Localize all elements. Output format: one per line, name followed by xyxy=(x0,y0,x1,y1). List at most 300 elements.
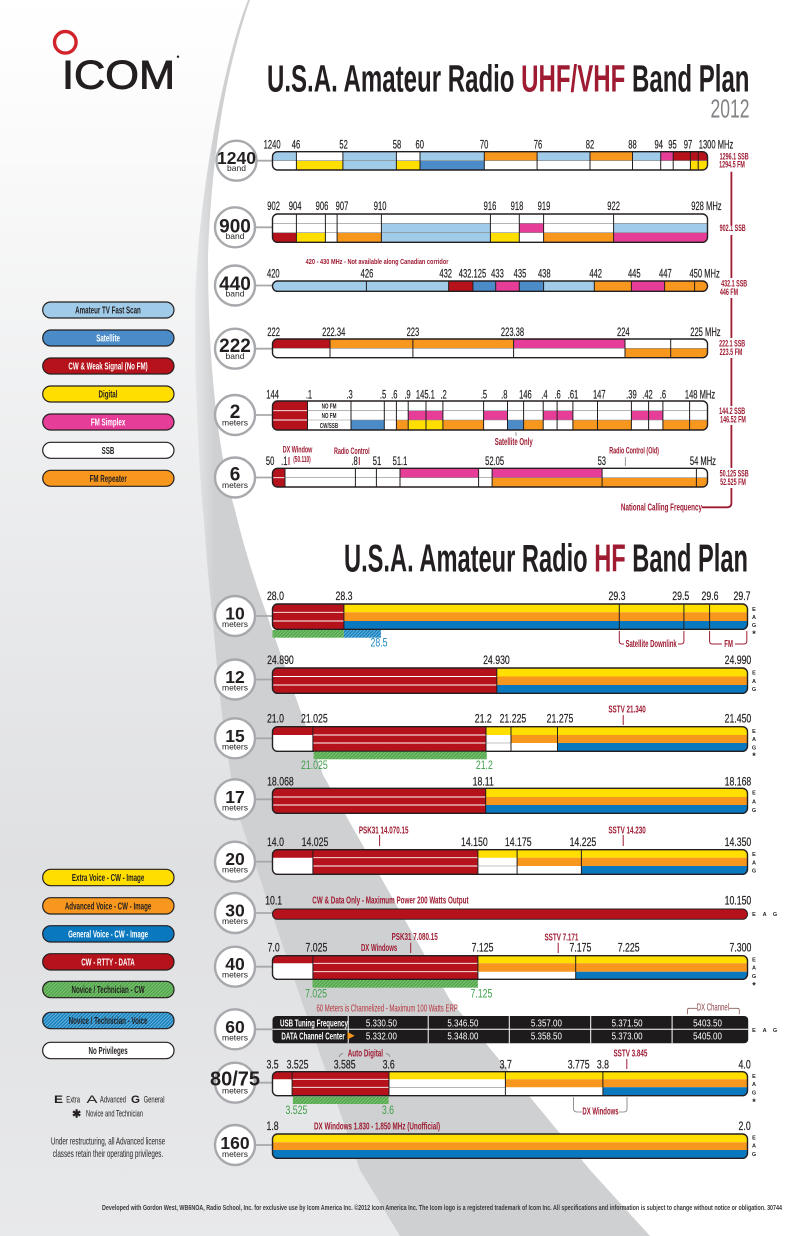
frequency labels: 440: 450 MHz xyxy=(689,268,720,281)
frequency labels: 12 meters: 24.890 xyxy=(267,655,294,667)
band: 440 xyxy=(215,258,720,306)
frequency labels: 80/75 meters: 3.585 xyxy=(334,1059,356,1072)
class letters: 10 meters: * xyxy=(752,629,756,639)
class letters: 17 meters xyxy=(752,791,756,814)
band: 2 meters xyxy=(215,389,715,447)
note: restructuring xyxy=(51,1135,165,1159)
badge: 10 meters: meters xyxy=(222,619,248,629)
key: license letters xyxy=(54,1094,165,1120)
frequency labels: 440: 432.125 xyxy=(459,268,486,281)
frequency labels: 10 meters: 29.3 xyxy=(609,591,626,603)
logo: Icom: ICOM xyxy=(62,53,175,97)
frequency labels: 900: 922 xyxy=(607,201,620,214)
frequency labels: 900: 904 xyxy=(289,201,302,214)
badge: 10 meters xyxy=(215,596,272,636)
frequency labels: 1240: 1300 MHz xyxy=(699,139,733,152)
note: Canadian corridor: 420 - 430 MHz - Not available along Canadian corridor xyxy=(306,258,449,266)
calling frequency values: 432.1 SSB xyxy=(721,278,748,289)
bar: 30 meters xyxy=(272,909,748,919)
class letters: 40 meters: * xyxy=(752,980,756,990)
badge: 6 meters: meters xyxy=(222,480,248,490)
frequency labels: 900: 906 xyxy=(316,201,328,214)
note: 30 meters power: CW & Data Only - Maximum Power 200 Watts Output xyxy=(312,894,469,906)
novice segment: 15 meters xyxy=(301,752,493,772)
badge: 440 band: 440 xyxy=(219,274,251,295)
frequency labels: 440: 432 xyxy=(439,268,452,281)
class letters: 10 meters: G xyxy=(752,623,756,629)
legend: UHF/VHF modes: Amateur TV Fast Scan xyxy=(75,304,141,316)
frequency labels: 80/75 meters: 3.525 xyxy=(287,1059,309,1072)
note: 60 meters channelized: 60 Meters is Channelized - Maximum 100 Watts ERP xyxy=(316,1003,458,1014)
legend: HF license classes: No Privileges xyxy=(88,1044,128,1056)
frequency labels: 40 meters: 7.0 xyxy=(268,943,280,955)
frequency labels: 15 meters: 21.0 xyxy=(267,714,284,726)
key: license letters: Advanced xyxy=(100,1094,126,1105)
novice segment: 40 meters xyxy=(305,980,493,1001)
frequency labels: 1240: 46 xyxy=(292,139,300,152)
note: restructuring: Under restructuring, all Advanced license xyxy=(51,1135,165,1147)
class letters: 15 meters: * xyxy=(752,751,756,761)
class letters: 12 meters xyxy=(752,670,756,693)
frequency labels: 80/75 meters: 3.8 xyxy=(597,1059,609,1072)
legend: UHF/VHF modes: SSB xyxy=(102,444,114,456)
table: 60 meters channels: 5405.00 xyxy=(693,1030,722,1042)
novice segment: 40 meters: 7.025 xyxy=(305,989,327,1001)
key: license letters: General xyxy=(144,1094,165,1105)
frequency labels: 900 xyxy=(267,201,722,214)
bar: 1240 segments xyxy=(272,152,708,170)
frequency labels: 2 meters: .5 xyxy=(380,389,386,402)
callouts: 6 meters windows: DX Window xyxy=(283,444,313,455)
table: 60 meters channels: 5.357.00 xyxy=(531,1018,562,1029)
frequency labels: 900: 910 xyxy=(374,201,387,214)
frequency labels: 1240: 95 xyxy=(668,139,677,152)
badge: 900 band: band xyxy=(226,231,245,241)
frequency labels: 6 meters: .1 xyxy=(281,456,287,469)
class letters: 30 meters xyxy=(752,912,777,918)
class letters: 10 meters xyxy=(752,607,756,639)
callout: DX channel: DX Channel xyxy=(697,1002,729,1013)
frequency labels: 222: 223.38 xyxy=(501,327,524,340)
band: 20 meters xyxy=(215,824,756,882)
table: 60 meters channels: 5.358.50 xyxy=(531,1030,562,1042)
class letters: 60 meters: A xyxy=(763,1028,767,1034)
badge: 17 meters xyxy=(215,779,272,819)
frequency labels: 1240: 58 xyxy=(393,139,401,152)
frequency labels: 900: 916 xyxy=(484,201,496,214)
table: 60 meters channels: 5.373.00 xyxy=(612,1030,643,1042)
bar: 160 meters segments xyxy=(272,1134,748,1158)
badge: 20 meters xyxy=(215,842,272,882)
legend: UHF/VHF modes: FM Repeater xyxy=(90,472,127,484)
badge: 80/75 meters xyxy=(210,1063,272,1103)
novice segment: 80/75 meters: 3.525 xyxy=(286,1105,308,1117)
frequency labels: 1240 xyxy=(264,139,733,152)
callouts: PSK31 and SSTV 20 meters: SSTV 14.230 xyxy=(608,824,646,836)
national calling frequency column xyxy=(621,151,749,513)
frequency labels: 2 meters: 145.1 xyxy=(416,389,435,402)
frequency labels: 222: 225 MHz xyxy=(690,327,721,340)
table: 60 meters channels xyxy=(272,1016,748,1043)
callouts: 6 meters windows xyxy=(283,444,659,466)
class letters: 160 meters: A xyxy=(752,1144,756,1150)
badge: 40 meters: 40 xyxy=(225,954,245,974)
frequency labels: 440: 435 xyxy=(514,268,526,281)
frequency labels: 900: 919 xyxy=(538,201,550,214)
legend: HF license classes: General Voice - CW - Image xyxy=(68,928,148,940)
note: 160 meters DX windows: DX Windows 1.830 - 1.850 MHz (Unofficial) xyxy=(314,1120,440,1132)
class letters: 40 meters: G xyxy=(752,974,756,980)
badge: 222 band: band xyxy=(226,351,245,361)
badge: 40 meters: meters xyxy=(222,970,248,980)
frequency labels: 80/75 meters: 3.5 xyxy=(266,1059,279,1072)
frequency labels: 900: 918 xyxy=(511,201,523,214)
class letters: 160 meters: E xyxy=(752,1136,756,1142)
calling frequency values: 144.2 SSB xyxy=(719,406,746,416)
band: 15 meters xyxy=(215,703,756,772)
calling frequency line xyxy=(702,172,731,507)
badge: 60 meters: 60 xyxy=(225,1017,245,1037)
legend: UHF/VHF modes: Digital xyxy=(99,388,117,400)
frequency labels: 17 meters xyxy=(267,777,752,789)
class letters: 10 meters: E xyxy=(752,607,756,613)
frequency labels: 30 meters: 10.1 xyxy=(265,895,282,908)
badge: 6 meters xyxy=(215,458,272,498)
badge: 30 meters: 30 xyxy=(225,900,245,920)
frequency labels: 40 meters: 7.225 xyxy=(618,943,640,955)
badge: 160 meters xyxy=(215,1125,272,1165)
frequency labels: 10 meters xyxy=(267,591,751,603)
legend: HF license classes: Novice / Technician - CW xyxy=(72,983,145,995)
class letters: 20 meters xyxy=(752,852,756,875)
callouts: auto digital and SSTV xyxy=(339,1047,648,1069)
frequency labels: 80/75 meters: 3.6 xyxy=(383,1059,395,1072)
frequency labels: 2 meters: 148 MHz xyxy=(685,389,715,402)
frequency labels: 12 meters: 24.990 xyxy=(725,655,752,667)
key: license letters: G xyxy=(131,1094,140,1106)
callouts: PSK31 and SSTV 20 meters xyxy=(359,824,646,846)
table: 60 meters channels: DATA Channel Center xyxy=(281,1030,345,1042)
frequency labels: 6 meters: 51 xyxy=(373,456,381,469)
frequency labels: 17 meters: 18.11 xyxy=(473,777,494,789)
badge: 1240 band: 1240 xyxy=(217,148,256,168)
callouts: 40 meters windows: PSK31 7.080.15 xyxy=(392,930,438,942)
frequency labels: 6 meters: 51.1 xyxy=(393,456,407,469)
note: restructuring: classes retain their operating privileges. xyxy=(53,1147,163,1159)
callout: DX channel xyxy=(688,1002,739,1014)
class letters: 15 meters xyxy=(752,729,756,761)
class letters: 160 meters xyxy=(752,1136,756,1158)
legend: HF license classes: Extra Voice - CW - Image xyxy=(72,871,145,883)
frequency labels: 2 meters: .5 xyxy=(481,389,487,402)
callout: national calling frequency: National Calling Frequency xyxy=(621,501,702,513)
callouts: 6 meters windows: (50.110) xyxy=(293,456,311,464)
band: 30 meters xyxy=(215,893,777,933)
badge: 440 band: band xyxy=(226,288,245,298)
brackets: satellite downlink and FM: FM xyxy=(724,639,733,649)
frequency labels: 1240: 60 xyxy=(415,139,424,152)
badge: 160 meters: 160 xyxy=(220,1133,250,1153)
calling frequency values: 222.1 SSB xyxy=(719,338,746,349)
frequency labels: 20 meters: 14.150 xyxy=(461,837,488,849)
frequency labels: 222 xyxy=(267,327,721,340)
calling frequency values: 1294.5 FM xyxy=(719,159,745,170)
badge: 15 meters: meters xyxy=(222,741,248,751)
bar: 222 segments xyxy=(272,339,708,358)
frequency labels: 80/75 meters: 3.7 xyxy=(500,1059,512,1072)
frequency labels: 160 meters: 2.0 xyxy=(739,1121,751,1133)
class letters: 10 meters: A xyxy=(752,615,756,621)
table: 60 meters channels: USB Tuning Frequency xyxy=(280,1017,348,1029)
class letters: 80/75 meters xyxy=(752,1074,756,1107)
calling frequency values: 52.525 FM xyxy=(720,477,746,487)
novice segment: 80/75 meters xyxy=(286,1097,394,1117)
key: license letters: E xyxy=(54,1094,63,1106)
bar: 440 segments xyxy=(272,281,708,291)
frequency labels: 40 meters: 7.175 xyxy=(570,943,592,955)
calling frequency values xyxy=(719,151,749,487)
frequency labels: 2 meters xyxy=(266,389,715,402)
frequency labels: 30 meters xyxy=(265,895,752,908)
key: license letters: Novice and Technician xyxy=(86,1108,143,1119)
frequency labels: 10 meters: 29.5 xyxy=(672,591,690,603)
bar: 2 meters segments: NO FM xyxy=(322,413,336,420)
frequency labels: 10 meters: 28.0 xyxy=(267,591,284,603)
key: license letters: Extra xyxy=(66,1094,80,1105)
class letters: 30 meters: G xyxy=(773,912,777,918)
class letters: 160 meters: G xyxy=(752,1152,756,1158)
frequency labels: 2 meters: 144 xyxy=(266,389,279,402)
frequency labels: 2 meters: .4 xyxy=(541,389,548,402)
band: 60 meters xyxy=(215,1002,777,1049)
frequency labels: 15 meters: 21.450 xyxy=(725,714,752,726)
callout: SSTV 21.340: SSTV 21.340 xyxy=(608,703,646,715)
frequency labels: 440: 426 xyxy=(361,268,373,281)
legend: UHF/VHF modes: FM Simplex xyxy=(91,416,126,428)
frequency labels: 2 meters: .8 xyxy=(501,389,507,402)
class letters: 12 meters: A xyxy=(752,679,756,685)
frequency labels: 15 meters xyxy=(267,714,752,726)
bracket: DX windows xyxy=(574,1097,627,1117)
class letters: 60 meters xyxy=(752,1028,777,1034)
badge: 222 band: 222 xyxy=(219,336,251,357)
badge: 1240 band: band xyxy=(227,163,246,173)
frequency labels: 6 meters: .8 xyxy=(351,456,358,469)
bar: 15 meters segments xyxy=(272,727,748,751)
band: 17 meters xyxy=(215,777,756,819)
frequency labels: 1240: 97 xyxy=(684,139,692,152)
band: 6 meters xyxy=(215,444,716,498)
frequency labels: 12 meters xyxy=(267,655,752,667)
frequency labels: 20 meters: 14.025 xyxy=(302,837,329,849)
band: 1240 xyxy=(216,139,733,181)
frequency labels: 2 meters: .6 xyxy=(660,389,666,402)
calling frequency values: 146.52 FM xyxy=(720,414,746,425)
frequency labels: 15 meters: 21.025 xyxy=(301,714,328,726)
frequency labels: 40 meters: 7.125 xyxy=(472,943,494,955)
frequency labels: 1240: 1240 xyxy=(264,139,281,152)
logo: Icom xyxy=(55,32,179,97)
frequency labels: 6 meters: 53 xyxy=(598,456,606,469)
class letters: 12 meters: E xyxy=(752,670,756,676)
bar: 2 meters segments: NO FM xyxy=(322,404,336,411)
frequency labels: 222: 224 xyxy=(617,327,630,340)
legend: HF license classes xyxy=(43,869,174,1059)
callouts: auto digital and SSTV: Auto Digital xyxy=(348,1047,383,1059)
bar: 20 meters segments xyxy=(272,850,748,874)
frequency labels: 20 meters: 14.350 xyxy=(725,837,752,849)
badge: 20 meters: 20 xyxy=(225,849,245,869)
badge: 2 meters: meters xyxy=(222,418,248,428)
class letters: 15 meters: E xyxy=(752,729,756,735)
frequency labels: 222: 223 xyxy=(407,327,419,340)
band: 160 meters xyxy=(215,1120,756,1165)
frequency labels: 15 meters: 21.275 xyxy=(547,714,574,726)
badge: 12 meters xyxy=(215,660,272,700)
legend: HF license classes: CW - RTTY - DATA xyxy=(81,956,135,968)
frequency labels: 40 meters xyxy=(268,943,752,955)
calling frequency values: 1296.1 SSB xyxy=(720,151,749,162)
callouts: 40 meters windows xyxy=(361,930,579,953)
badge: 15 meters xyxy=(215,718,272,758)
frequency labels: 20 meters: 14.175 xyxy=(505,837,532,849)
calling frequency values: 902.1 SSB xyxy=(720,223,746,233)
callout: satellite only: Satellite Only xyxy=(495,437,533,447)
badge: 80/75 meters: 80/75 xyxy=(210,1068,260,1090)
class letters: 17 meters: E xyxy=(752,791,756,797)
frequency labels: 10 meters: 28.3 xyxy=(336,591,353,603)
bar: 2 meters segments xyxy=(272,401,708,430)
table: 60 meters channels: 5.348.00 xyxy=(447,1030,478,1042)
badge: 440 band xyxy=(215,266,272,306)
callouts: 6 meters windows: Radio Control xyxy=(334,446,370,456)
callout: SSTV 21.340 xyxy=(608,703,646,725)
frequency labels: 40 meters: 7.300 xyxy=(730,943,752,955)
badge: 17 meters: 17 xyxy=(225,787,245,807)
frequency labels: 1240: 76 xyxy=(534,139,542,152)
class letters: 20 meters: A xyxy=(752,860,756,866)
band: 10 meters xyxy=(215,591,756,650)
class letters: 17 meters: A xyxy=(752,800,756,806)
badge: 1240 band xyxy=(216,141,272,181)
bar: 2 meters segments: CW/SSB xyxy=(320,423,338,430)
frequency labels: 1240: 70 xyxy=(480,139,489,152)
frequency labels: 40 meters: 7.025 xyxy=(306,943,328,955)
table: 60 meters channels: 5.371.50 xyxy=(612,1018,643,1029)
callouts: 6 meters windows: Radio Control (Old) xyxy=(609,445,659,456)
badge: 40 meters xyxy=(215,947,272,987)
band: 900 xyxy=(215,201,722,247)
frequency labels: 900: 907 xyxy=(336,201,348,214)
badge: 17 meters: meters xyxy=(222,802,248,812)
class letters: 20 meters: G xyxy=(752,869,756,875)
legend: UHF/VHF modes: Satellite xyxy=(96,332,120,344)
frequency labels: 2 meters: 146 xyxy=(519,389,532,402)
callouts: auto digital and SSTV: SSTV 3.845 xyxy=(613,1047,648,1059)
frequency labels: 15 meters: 21.2 xyxy=(475,714,492,726)
frequency labels: 2 meters: .9 xyxy=(404,389,411,402)
band: 12 meters xyxy=(215,655,756,700)
class letters: 80/75 meters: G xyxy=(752,1091,756,1097)
frequency labels: 440: 442 xyxy=(589,268,602,281)
frequency labels: 440: 438 xyxy=(538,268,551,281)
badge: 30 meters xyxy=(215,893,272,933)
novice segments: 10 meters xyxy=(272,630,388,650)
class letters: 30 meters: E xyxy=(752,912,756,918)
frequency labels: 1240: 94 xyxy=(654,139,663,152)
frequency labels: 222: 222.34 xyxy=(322,327,346,340)
callouts: 40 meters windows: DX Windows xyxy=(361,943,398,953)
frequency labels: 1240: 52 xyxy=(339,139,348,152)
badge: 10 meters: 10 xyxy=(225,604,245,624)
class letters: 15 meters: A xyxy=(752,737,756,743)
frequency labels: 2 meters: .6 xyxy=(391,389,397,402)
class letters: 20 meters: E xyxy=(752,852,756,858)
legend: HF license classes: Advanced Voice - CW - Image xyxy=(65,900,152,912)
frequency labels: 80/75 meters: 4.0 xyxy=(739,1059,751,1072)
key: license letters: ✱ xyxy=(72,1108,81,1120)
frequency labels: 2 meters: .39 xyxy=(626,389,637,402)
badge: 80/75 meters: meters xyxy=(222,1086,248,1096)
badge: 2 meters: 2 xyxy=(230,402,240,423)
title: UHF/VHF band plan xyxy=(267,58,750,124)
badge: 900 band xyxy=(215,207,272,247)
badge: 6 meters: 6 xyxy=(230,464,240,486)
class letters: 80/75 meters: E xyxy=(752,1074,756,1080)
frequency labels: 20 meters: 14.225 xyxy=(570,837,597,849)
badge: 12 meters: meters xyxy=(222,682,248,692)
novice segment: 80/75 meters: 3.6 xyxy=(382,1105,394,1117)
badge: 2 meters xyxy=(215,395,272,435)
frequency labels: 2 meters: .61 xyxy=(568,389,578,402)
bar: 900 segments xyxy=(272,214,708,242)
class letters: 60 meters: G xyxy=(773,1028,777,1034)
badge: 12 meters: 12 xyxy=(225,667,245,687)
brackets: satellite downlink and FM xyxy=(619,631,747,649)
frequency labels: 15 meters: 21.225 xyxy=(500,714,527,726)
frequency labels: 20 meters: 14.0 xyxy=(267,837,284,849)
table: 60 meters channels: 5.332.00 xyxy=(366,1030,397,1042)
table: 60 meters channels: 5403.50 xyxy=(693,1018,722,1029)
frequency labels: 6 meters: 50 xyxy=(266,456,275,469)
callouts: PSK31 and SSTV 20 meters: PSK31 14.070.15 xyxy=(359,824,409,836)
novice segment: 15 meters: 21.2 xyxy=(476,760,493,772)
frequency labels: 440: 420 xyxy=(267,268,280,281)
bar: 10 meters segments xyxy=(272,604,748,629)
frequency labels: 6 meters: 52.05 xyxy=(485,456,504,469)
badge: 30 meters: meters xyxy=(222,916,248,926)
frequency labels: 20 meters xyxy=(267,837,752,849)
badge: 60 meters: meters xyxy=(222,1032,248,1042)
frequency labels: 30 meters: 10.150 xyxy=(725,895,752,908)
frequency labels: 2 meters: 147 xyxy=(593,389,606,402)
class letters: 15 meters: G xyxy=(752,746,756,752)
bar: 40 meters segments xyxy=(272,956,748,979)
title: UHF/VHF band plan: 2012 xyxy=(710,94,750,124)
bar: 80/75 meters segments xyxy=(272,1072,748,1096)
frequency labels: 160 meters: 1.8 xyxy=(266,1121,279,1133)
frequency labels: 440: 445 xyxy=(628,268,641,281)
bracket: DX windows: DX Windows xyxy=(582,1106,619,1117)
frequency labels: 10 meters: 29.7 xyxy=(734,591,751,603)
class letters: 40 meters: A xyxy=(752,966,756,972)
novice segment: 40 meters: 7.125 xyxy=(471,989,493,1001)
frequency labels: 2 meters: .3 xyxy=(346,389,353,402)
badge: 20 meters: meters xyxy=(222,865,248,875)
calling frequency values: 223.5 FM xyxy=(720,347,742,357)
frequency labels: 2 meters: .42 xyxy=(642,389,653,402)
frequency labels: 17 meters: 18.068 xyxy=(267,777,294,789)
